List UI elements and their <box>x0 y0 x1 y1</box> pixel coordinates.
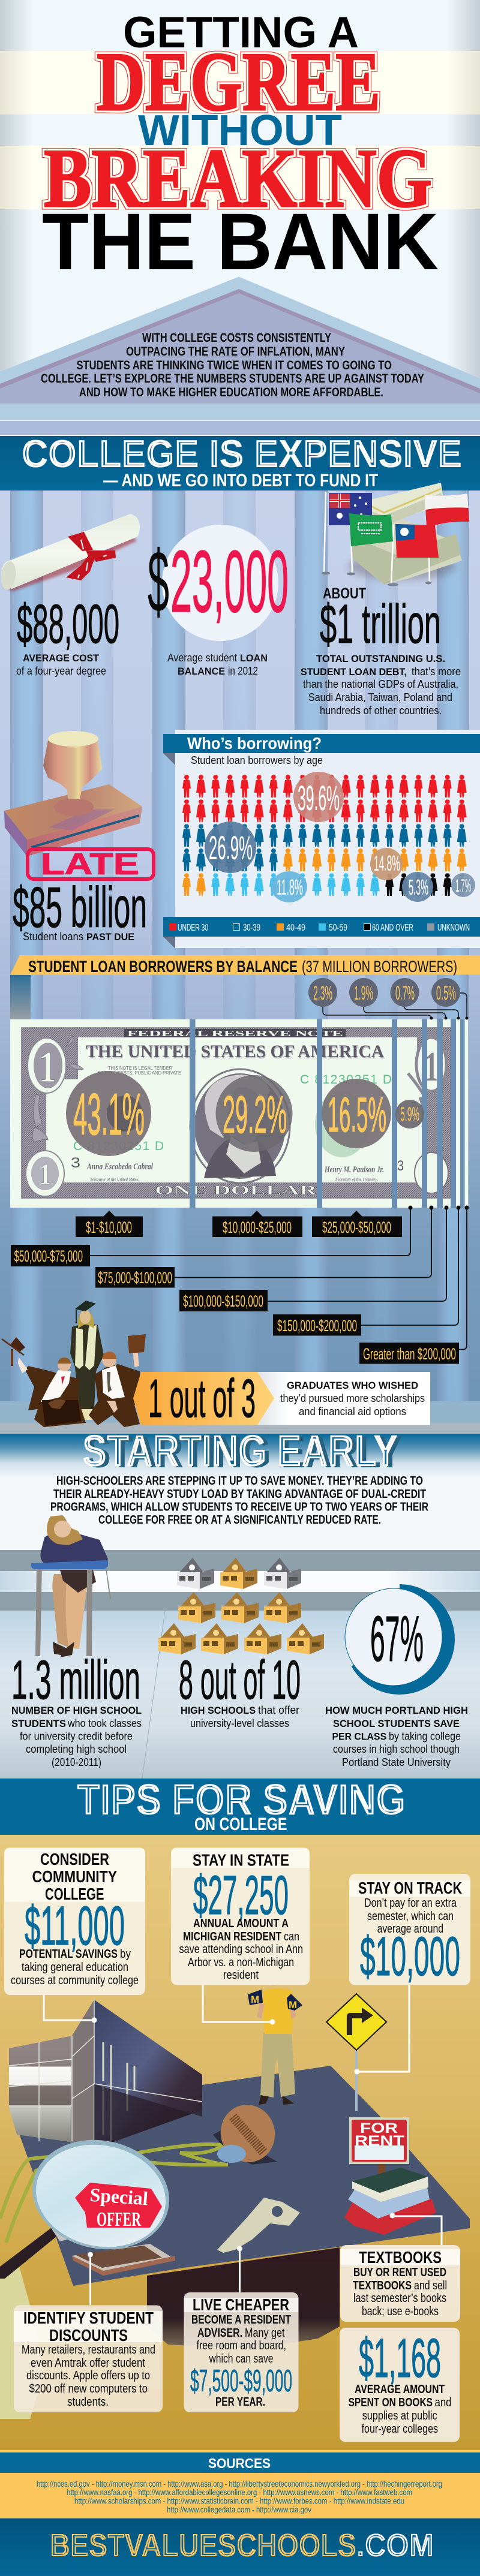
card: $1,168: four-year colleges <box>362 2422 438 2436</box>
stat: $1 trillion: TOTAL OUTSTANDING U.S. <box>316 653 445 664</box>
legend: 50-59 <box>329 923 347 933</box>
stat: $85 billion: PAST DUE <box>86 931 134 943</box>
stat: $1 trillion: Saudi Arabia, Taiwan, Poland and <box>308 691 452 703</box>
stat: 1.3 million: completing high school <box>26 1743 127 1755</box>
callout: percentages by age: 39.6% <box>298 779 340 818</box>
infographic canvas: 23,000 <box>170 532 289 630</box>
title: WITHOUT <box>138 107 342 155</box>
stat: $85 billion: $85 billion <box>13 875 147 940</box>
stat: 1.3 million: STUDENTS <box>11 1718 66 1729</box>
card: live cheaper: ADVISER. <box>197 2327 242 2340</box>
stat: $1 trillion <box>301 585 461 717</box>
card: $1,168: AVERAGE AMOUNT <box>355 2383 445 2396</box>
card: identify student discounts: discounts. Apple offers up to <box>26 2369 150 2382</box>
chart: dollar bill strips: Henry M. Paulson Jr. <box>324 1165 384 1175</box>
chart: dollar bill strips: 1 <box>38 1043 56 1092</box>
callouts: percentage circles on bill: 43.1% <box>73 1081 145 1147</box>
stat: $88,000: $88,000 <box>17 594 119 655</box>
card: live cheaper: BECOME A RESIDENT <box>191 2313 291 2327</box>
balance range labels: $50,000-$75,000 <box>14 1247 83 1265</box>
card: identify student discounts: IDENTIFY STUDENT <box>23 2309 154 2327</box>
icon: money stack with flags <box>322 483 469 586</box>
chart: dollar bill strips: 1 <box>39 1157 51 1191</box>
stat: $1 trillion: STUDENT LOAN DEBT, <box>301 666 407 678</box>
illustration: student at desk <box>31 1515 111 1657</box>
card: consider community college <box>4 1848 145 1995</box>
card: identify student discounts: even Amtrak offer student <box>31 2357 145 2370</box>
stat: $88,000: AVERAGE COST <box>23 652 100 664</box>
card: live cheaper: free room and board, <box>197 2339 286 2352</box>
card: identify student discounts: DISCOUNTS <box>49 2326 128 2345</box>
callout: 1 out of 3: and financial aid options <box>299 1406 406 1418</box>
callout: percentages by age: 26.9% <box>209 829 253 866</box>
sources: SOURCES <box>208 2455 271 2471</box>
callouts: small percentages with connectors: 2.3% <box>313 982 332 1004</box>
intro text: STUDENTS ARE THINKING TWICE WHEN IT COMES TO GOING TO <box>77 359 392 372</box>
card: stay on track: semester, which can <box>367 1910 454 1923</box>
callout: percentages by age: 11.8% <box>277 875 303 899</box>
illustration: student with pennants <box>248 1970 302 2105</box>
callout: 1 out of 3: 1 out of 3 <box>148 1369 256 1429</box>
card: textbooks: last semester’s books <box>353 2292 446 2305</box>
chart: dollar bill strips <box>10 1019 469 1208</box>
card: live cheaper: which can save <box>209 2352 274 2366</box>
callouts: percentage circles on bill: 16.5% <box>328 1088 386 1142</box>
legend: 40-49 <box>286 923 305 933</box>
stat: $23,000: $ <box>148 532 169 630</box>
card: consider community college: taking general education <box>22 1961 128 1974</box>
concrete ledge <box>0 1401 480 1434</box>
illustration: magnifying glass: Special <box>89 2184 149 2209</box>
card: consider community college: POTENTIAL SAVINGS <box>19 1948 118 1961</box>
paragraph: starting early: COLLEGE FOR FREE OR AT A SIGNIFICANTLY REDUCED RATE. <box>98 1513 381 1527</box>
section background: starting early <box>0 1434 480 1778</box>
callouts: percentage circles on bill <box>66 1071 424 1156</box>
chart: 67% donut <box>345 1584 455 1695</box>
stat: 1.3 million: who took classes <box>67 1717 142 1729</box>
title: THE BANK <box>42 197 439 287</box>
stat: $23,000: LOAN <box>240 652 268 664</box>
banner: borrowers by balance: STUDENT LOAN BORROWERS BY BALANCE <box>28 958 298 976</box>
header bar: tips for saving <box>0 1776 480 1835</box>
illustration: magnifying glass: OFFER <box>97 2208 141 2231</box>
pediment <box>0 277 480 435</box>
sources: http://www.collegedata.com - http://www.cia.gov <box>167 2505 311 2514</box>
callouts: small percentages with connectors: 0.5% <box>436 982 456 1004</box>
icon: road sign <box>326 1994 386 2111</box>
stat: $85 billion: Student loans <box>23 931 83 943</box>
chart: dollar bill strips: FEDERAL RESERVE NOTE <box>127 1030 343 1039</box>
card: stay in state: can <box>284 1930 299 1943</box>
subheading: Student loan borrowers by age <box>191 754 323 766</box>
illustration: for rent sign <box>349 2117 409 2175</box>
chart: dollar bill strips: Treasurer of the United States. <box>90 1177 139 1182</box>
intro text: WITH COLLEGE COSTS CONSISTENTLY <box>142 331 331 345</box>
stat: $23,000: in 2012 <box>228 665 258 677</box>
card: stay in state: MICHIGAN RESIDENT <box>183 1930 281 1943</box>
chart: dollar bill strips: THE UNITED STATES OF AMERICA <box>86 1043 385 1063</box>
card: stay on track: average around <box>377 1922 443 1936</box>
legend: 30-39 <box>243 923 260 933</box>
chart: dollar bill strips: 3 <box>397 1158 404 1174</box>
card: stay on track <box>349 1874 470 1987</box>
stat: $1 trillion: ABOUT <box>323 585 366 602</box>
sources <box>0 2450 480 2518</box>
stat: 1.3 million: (2010-2011) <box>52 1756 101 1768</box>
card: consider community college: by <box>120 1948 131 1961</box>
pictogram: borrowers by age <box>179 775 469 898</box>
late stamp label <box>28 847 154 881</box>
balance range labels: $150,000-$200,000 <box>277 1317 357 1335</box>
legend: 60 AND OVER <box>372 923 413 933</box>
footer logo: BESTVALUESCHOOLS <box>50 2527 356 2563</box>
section background: college is expensive <box>0 490 480 1402</box>
illustration: laptop <box>72 2244 175 2276</box>
card: textbooks: BUY OR RENT USED <box>353 2266 446 2279</box>
card: stay in state <box>171 1848 310 1985</box>
card: $1,168 <box>340 2328 460 2442</box>
card: $1,168: SPENT ON BOOKS <box>349 2396 433 2409</box>
callouts: percentage circles on bill: 29.2% <box>223 1085 287 1144</box>
callouts: small percentages with connectors: 0.7% <box>395 982 415 1004</box>
card: live cheaper: LIVE CHEAPER <box>193 2295 289 2314</box>
header bar: tips for saving: TIPS FOR SAVING <box>77 1776 406 1824</box>
intro text <box>41 331 424 399</box>
callout: 1 out of 3: GRADUATES WHO WISHED <box>287 1380 418 1391</box>
balance range labels: $75,000-$100,000 <box>98 1269 172 1287</box>
callout: 1 out of 3: they’d pursued more scholarships <box>280 1392 425 1404</box>
chart: dollar bill strips: Secretary of the Treasury. <box>335 1177 378 1182</box>
header bar: college is expensive: — AND WE GO INTO DEBT TO FUND IT <box>103 471 378 490</box>
header bar: tips for saving: ON COLLEGE <box>194 1814 287 1834</box>
heading: who's borrowing: Who’s borrowing? <box>187 734 322 753</box>
paragraph: starting early <box>50 1474 428 1527</box>
stat: $1 trillion: that’s more <box>412 666 461 678</box>
card: stay in state: ANNUAL AMOUNT A <box>193 1917 289 1930</box>
card: stay in state: Arbor vs. a non-Michigan <box>188 1956 294 1969</box>
illustration: student with pennants: M <box>251 1994 259 2005</box>
stat: $85 billion <box>13 875 147 943</box>
text: Portland savings: by taking college <box>389 1731 461 1743</box>
chart: dollar bill strips: Anna Escobedo Cabral <box>86 1162 154 1172</box>
card: textbooks: TEXTBOOKS <box>359 2248 442 2267</box>
card: stay in state: STAY IN STATE <box>193 1850 289 1870</box>
title <box>42 8 439 287</box>
balance range labels: $25,000-$50,000 <box>322 1218 391 1236</box>
balance range labels: $1-$10,000 <box>86 1218 132 1236</box>
title: DEGREE <box>97 35 380 128</box>
stat: $88,000: of a four-year degree <box>16 665 106 677</box>
callouts: small percentages with connectors: 1.9% <box>354 982 373 1004</box>
card: consider community college: CONSIDER <box>40 1850 109 1868</box>
stat: $1 trillion: than the national GDPs of Australia, <box>303 678 458 690</box>
callouts: small percentages with connectors <box>308 978 468 1019</box>
balance range labels <box>11 1205 469 1364</box>
stat: 8 out of 10 <box>179 1650 301 1729</box>
card: live cheaper: PER YEAR. <box>215 2396 265 2409</box>
illustration: tassel <box>0 2144 228 2419</box>
card: consider community college: $11,000 <box>25 1895 125 1957</box>
stat: 8 out of 10: that offer <box>258 1704 299 1716</box>
illustration: mortarboard <box>11 2066 470 2349</box>
header background <box>0 0 480 435</box>
footer logo <box>0 2518 480 2576</box>
chart: dollar bill strips: ONE DOLLAR <box>155 1182 318 1197</box>
chart: dollar bill strips: FOR ALL DEBTS, PUBLIC AND PRIVATE <box>98 1070 181 1076</box>
illustration: books <box>344 2168 436 2235</box>
callout: percentages by age: 14.8% <box>374 851 400 875</box>
balance range labels: $10,000-$25,000 <box>223 1218 292 1236</box>
stat: 1.3 million: for university credit before <box>20 1731 133 1743</box>
title: GETTING A <box>123 8 359 57</box>
card: stay in state: $27,250 <box>193 1865 289 1926</box>
card: identify student discounts <box>14 2305 163 2412</box>
stat: $1 trillion: hundreds of other countries. <box>320 705 442 717</box>
chart: dollar bill strips: C 81230251 D <box>73 1139 164 1153</box>
chart: dollar bill strips: THIS NOTE IS LEGAL TENDER <box>108 1066 172 1071</box>
late stamp label: LATE <box>41 847 139 881</box>
card: consider community college: COMMUNITY <box>32 1867 117 1886</box>
stat: $88,000 <box>16 594 119 677</box>
banner: borrowers by balance <box>10 955 480 976</box>
card: $1,168: supplies at public <box>362 2409 437 2422</box>
chart: dollar bill strips: THE UNITED STATES OF AMERICA <box>86 1042 384 1061</box>
chart: dollar bill strips: 3 <box>71 1155 80 1171</box>
text: Portland savings: courses in high school though <box>333 1743 460 1755</box>
illustration: for rent sign: RENT <box>355 2133 404 2149</box>
card: live cheaper: Many get <box>245 2327 285 2340</box>
intro text: OUTPACING THE RATE OF INFLATION, MANY <box>126 345 345 359</box>
chart: dollar bill strips: C 81230251 D <box>300 1073 392 1087</box>
tab above dollar bill <box>10 975 31 1019</box>
stat: $23,000: BALANCE <box>178 666 225 677</box>
callout: percentages by age: 5.3% <box>409 875 428 899</box>
stat: $23,000 <box>148 525 289 677</box>
card: consider community college: courses at community college <box>11 1974 139 1987</box>
illustration: graduates <box>2 1301 146 1427</box>
card: identify student discounts: students. <box>67 2396 109 2409</box>
icon: late stamp <box>4 731 142 856</box>
intro text: AND HOW TO MAKE HIGHER EDUCATION MORE AFFORDABLE. <box>79 386 383 399</box>
stat: 1.3 million: 1.3 million <box>11 1650 140 1711</box>
card: textbooks: TEXTBOOKS <box>353 2279 412 2292</box>
section background: tips <box>0 1835 480 2450</box>
icon: diploma scroll <box>0 514 140 591</box>
illustration: penny <box>213 2099 281 2168</box>
card: live cheaper <box>184 2292 299 2412</box>
card connectors <box>44 1985 442 2305</box>
legend <box>163 917 480 949</box>
sources: http://www.nasfaa.org - http://www.affordablecollegesonline.org - http://www.usnews.com - http://www.fastweb.com <box>67 2487 412 2497</box>
chart: dollar bill strips: 1 <box>425 1044 438 1090</box>
card: textbooks: and sell <box>414 2279 447 2292</box>
text: Portland savings: Portland State University <box>342 1756 451 1768</box>
stat: 1.3 million <box>11 1650 142 1768</box>
icon group: schools <box>158 1558 324 1654</box>
stat: 8 out of 10: university-level classes <box>190 1717 289 1729</box>
callouts: percentage circles on bill: 5.9% <box>400 1103 419 1125</box>
text: Portland savings: PER CLASS <box>332 1731 386 1743</box>
illustration: for rent sign: FOR <box>360 2120 398 2136</box>
illustration: key <box>217 2198 300 2253</box>
card: consider community college: COLLEGE <box>45 1885 104 1903</box>
card: stay in state: save attending school in Ann <box>179 1943 303 1956</box>
callout: percentages by age <box>205 772 475 902</box>
illustration: magnifying glass <box>0 2127 179 2279</box>
legend: UNDER 30 <box>178 923 208 933</box>
card: stay on track: Don’t pay for an extra <box>364 1897 457 1910</box>
text: Portland savings: SCHOOL STUDENTS SAVE <box>333 1718 460 1729</box>
infographic canvas: 8 out of 10 <box>179 1650 301 1711</box>
card: live cheaper: $7,500-$9,000 <box>190 2364 292 2399</box>
stat: 1.3 million: NUMBER OF HIGH SCHOOL <box>11 1705 142 1716</box>
text: Portland savings <box>325 1705 468 1768</box>
card: $1,168: and <box>434 2396 451 2409</box>
balance range labels: $100,000-$150,000 <box>183 1292 263 1310</box>
card: identify student discounts: $200 off new computers to <box>29 2382 148 2396</box>
card: stay in state: resident <box>223 1969 259 1982</box>
card: textbooks: back; use e-books <box>362 2305 439 2318</box>
illustration: college building <box>9 2000 202 2144</box>
heading: starting early: STARTING EARLY <box>82 1426 398 1476</box>
stat: $23,000: Average student <box>167 652 237 664</box>
illustration: student with pennants: M <box>289 1999 297 2011</box>
footer logo: .COM <box>356 2527 434 2563</box>
sources: http://www.scholarships.com - http://www.statisticbrain.com - http://www.forbes.com - http://www.indstate.edu <box>74 2496 404 2505</box>
card: identify student discounts: Many retailers, restaurants and <box>22 2343 155 2357</box>
stat: 8 out of 10: HIGH SCHOOLS <box>181 1705 256 1716</box>
panel: who's borrowing <box>163 730 480 949</box>
card: textbooks <box>340 2245 460 2322</box>
header bar: college is expensive: COLLEGE IS EXPENSIVE <box>22 432 462 476</box>
text: Portland savings: HOW MUCH PORTLAND HIGH <box>325 1705 468 1716</box>
